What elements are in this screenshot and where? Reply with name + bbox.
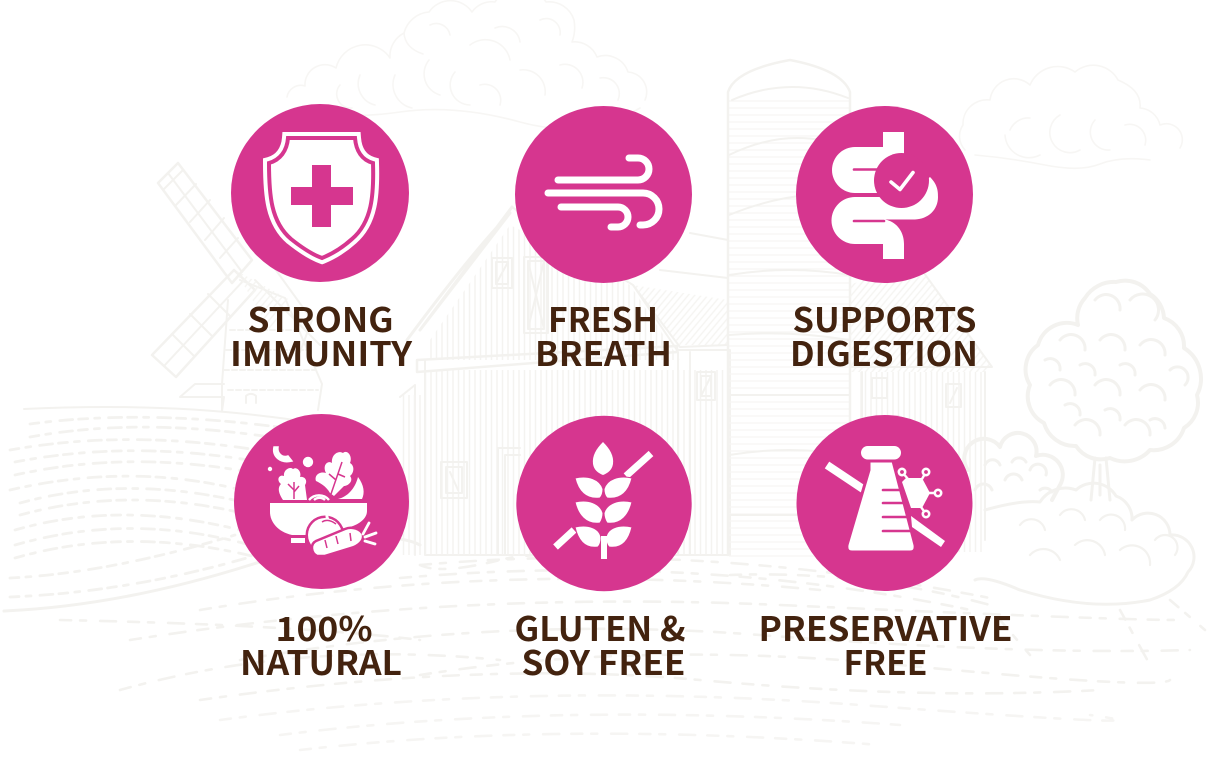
label: fresh breath xyxy=(535,293,672,376)
icon: wind xyxy=(548,158,659,227)
background: foreground furrows xyxy=(60,555,1205,750)
label: gluten and soy free xyxy=(514,602,686,685)
label: preservative free xyxy=(758,602,1012,685)
label: 100% natural xyxy=(240,602,402,685)
feature: supports digestion xyxy=(790,106,978,376)
label: fresh breath: FRESH xyxy=(548,293,658,342)
icon: salad bowl with apple and carrot xyxy=(268,447,376,556)
icon: crossed wheat xyxy=(556,442,651,559)
background: left cloud xyxy=(287,0,647,128)
feature: 100% natural xyxy=(234,414,409,685)
icon: crossed flask with molecule xyxy=(827,446,945,552)
badge circle: preservative free xyxy=(796,415,972,591)
label: 100% natural: 100% xyxy=(276,602,372,651)
feature: strong immunity xyxy=(230,104,413,376)
background: right cloud xyxy=(960,65,1182,168)
label: strong immunity xyxy=(230,293,413,376)
label: 100% natural: NATURAL xyxy=(240,636,402,685)
background: right barn wing xyxy=(850,273,992,555)
background: barn windows xyxy=(492,258,512,288)
feature: preservative free xyxy=(758,415,1012,685)
background: silo xyxy=(728,60,850,560)
feature: gluten and soy free xyxy=(514,416,692,685)
background: bushes xyxy=(964,433,1194,604)
badge circle: immunity xyxy=(231,104,409,282)
label: strong immunity: IMMUNITY xyxy=(230,327,413,376)
badge circle: natural xyxy=(234,414,409,589)
label: supports digestion xyxy=(790,293,978,376)
background: barn xyxy=(400,207,730,555)
background: tree xyxy=(1026,281,1201,500)
label: preservative free: PRESERVATIVE xyxy=(758,602,1012,651)
label: supports digestion: DIGESTION xyxy=(790,327,978,376)
label: preservative free: FREE xyxy=(844,636,928,685)
feature: fresh breath xyxy=(515,106,692,376)
label: fresh breath: BREATH xyxy=(535,327,672,376)
icon: intestine with check xyxy=(831,132,938,259)
background: windmill xyxy=(152,163,322,411)
label: strong immunity: STRONG xyxy=(248,293,394,342)
background: left field xyxy=(4,407,420,611)
label: gluten and soy free: GLUTEN & xyxy=(514,602,686,651)
badge circle: digestion xyxy=(796,106,973,283)
icon: shield with cross xyxy=(269,138,373,258)
badge circle: breath xyxy=(515,106,692,283)
label: supports digestion: SUPPORTS xyxy=(792,293,976,342)
badge circle: gluten free xyxy=(516,416,692,591)
label: gluten and soy free: SOY FREE xyxy=(522,636,686,685)
